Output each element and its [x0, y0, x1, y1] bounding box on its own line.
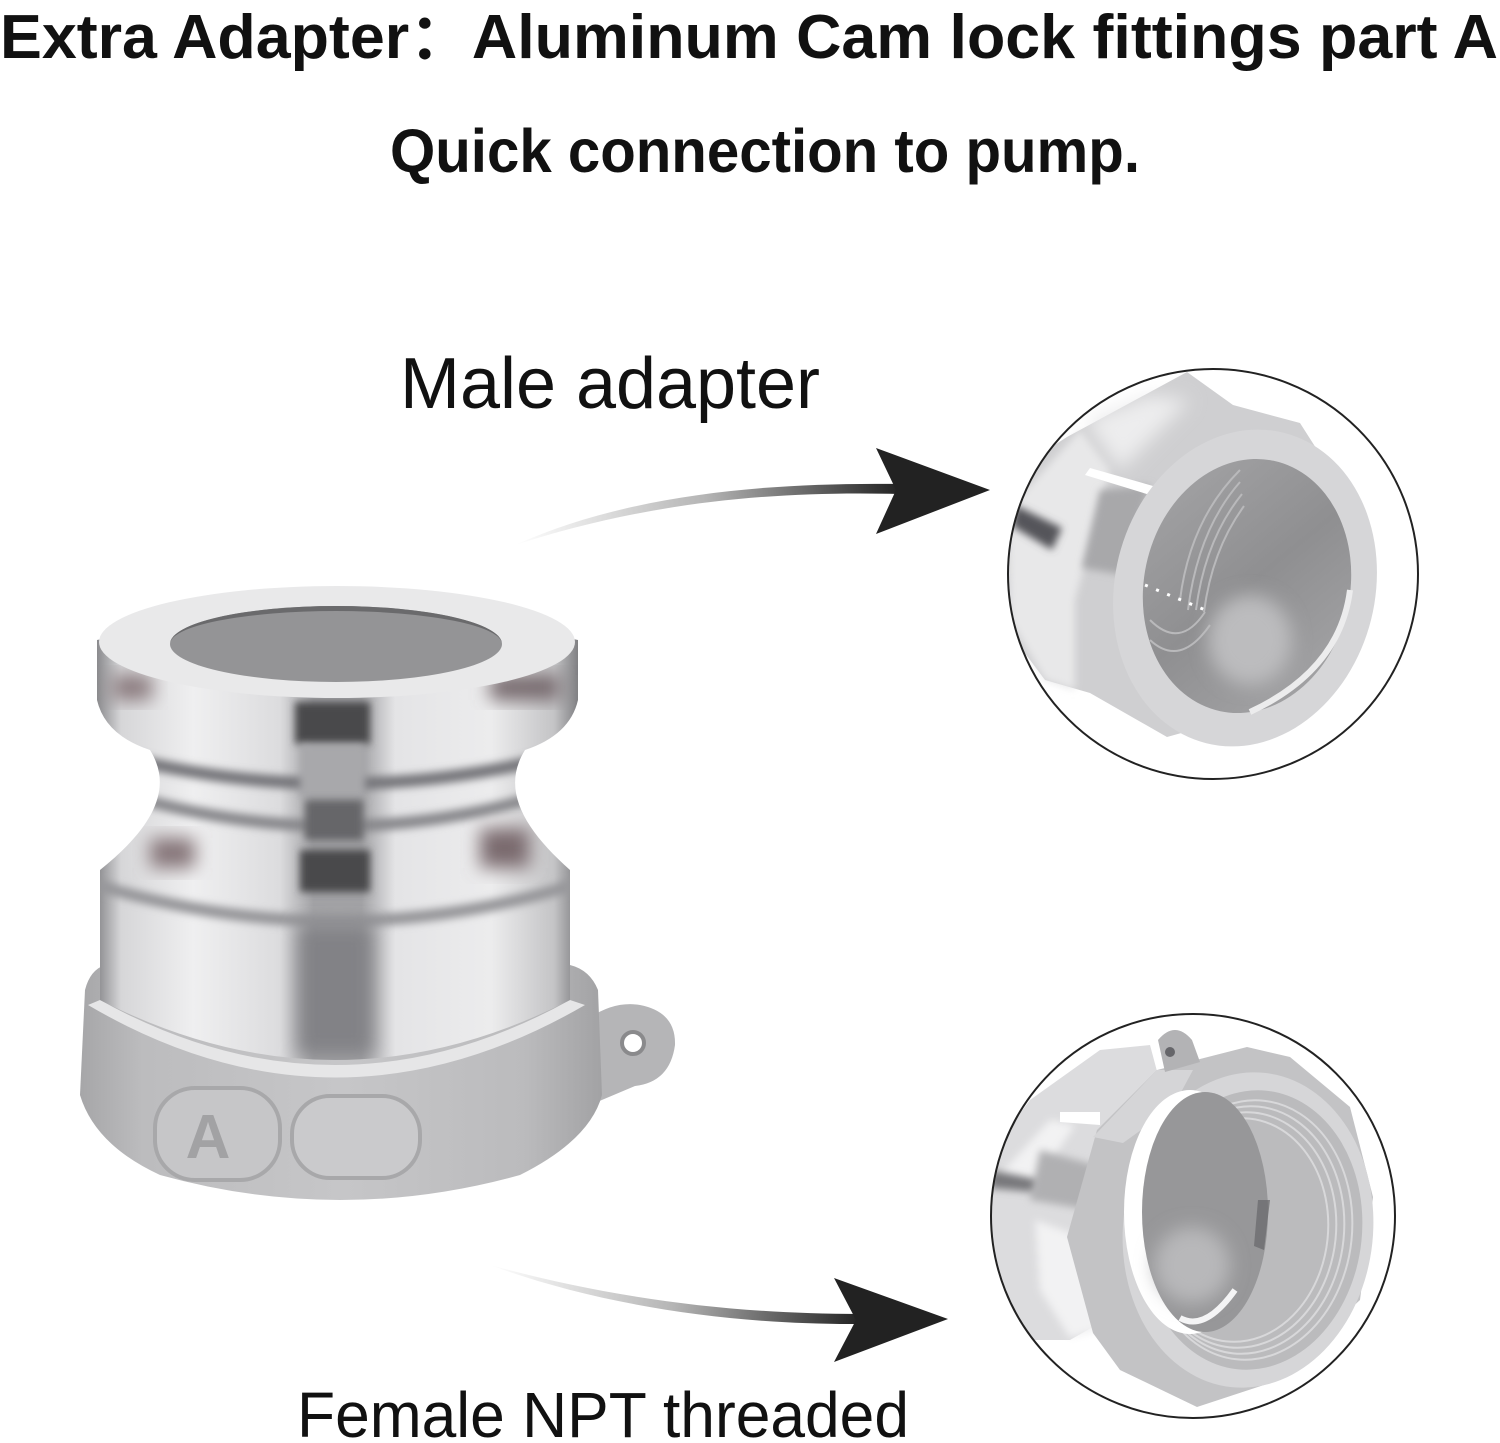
- raised oval with letter A: [155, 1088, 280, 1180]
- lug: [1158, 1030, 1200, 1072]
- threaded interior: [1170, 1090, 1362, 1370]
- hex nut: [1067, 1047, 1373, 1407]
- thread lines: [1150, 470, 1244, 651]
- ring face: [1122, 1072, 1374, 1388]
- arrow: to male adapter detail: [515, 448, 990, 545]
- detail circle: male adapter end: [1000, 369, 1418, 779]
- lug with hole: [580, 1004, 675, 1105]
- bore: [1124, 1090, 1202, 1334]
- subtitle: Quick connection to pump.: [390, 117, 1140, 185]
- detail circle: female NPT thread: [985, 1014, 1395, 1418]
- raised blank oval: [292, 1096, 420, 1178]
- raised oval with letter A: A: [186, 1103, 230, 1172]
- top face ring: [99, 586, 575, 698]
- title: Extra Adapter：Aluminum Cam lock fittings part A: [0, 3, 1498, 72]
- bright chamfer arc: [1250, 590, 1350, 712]
- cylinder body: [1000, 372, 1330, 737]
- label: male adapter: Male adapter: [400, 344, 820, 424]
- main product: aluminum cam lock adapter: [80, 586, 675, 1200]
- arrow: to female thread detail: [490, 1265, 948, 1362]
- polished body: [97, 586, 578, 1060]
- bore: [1142, 459, 1352, 713]
- bore opening: [170, 606, 502, 682]
- front ring: [1114, 446, 1377, 746]
- hex nut base: [80, 965, 602, 1200]
- cylinder body: [992, 1045, 1156, 1340]
